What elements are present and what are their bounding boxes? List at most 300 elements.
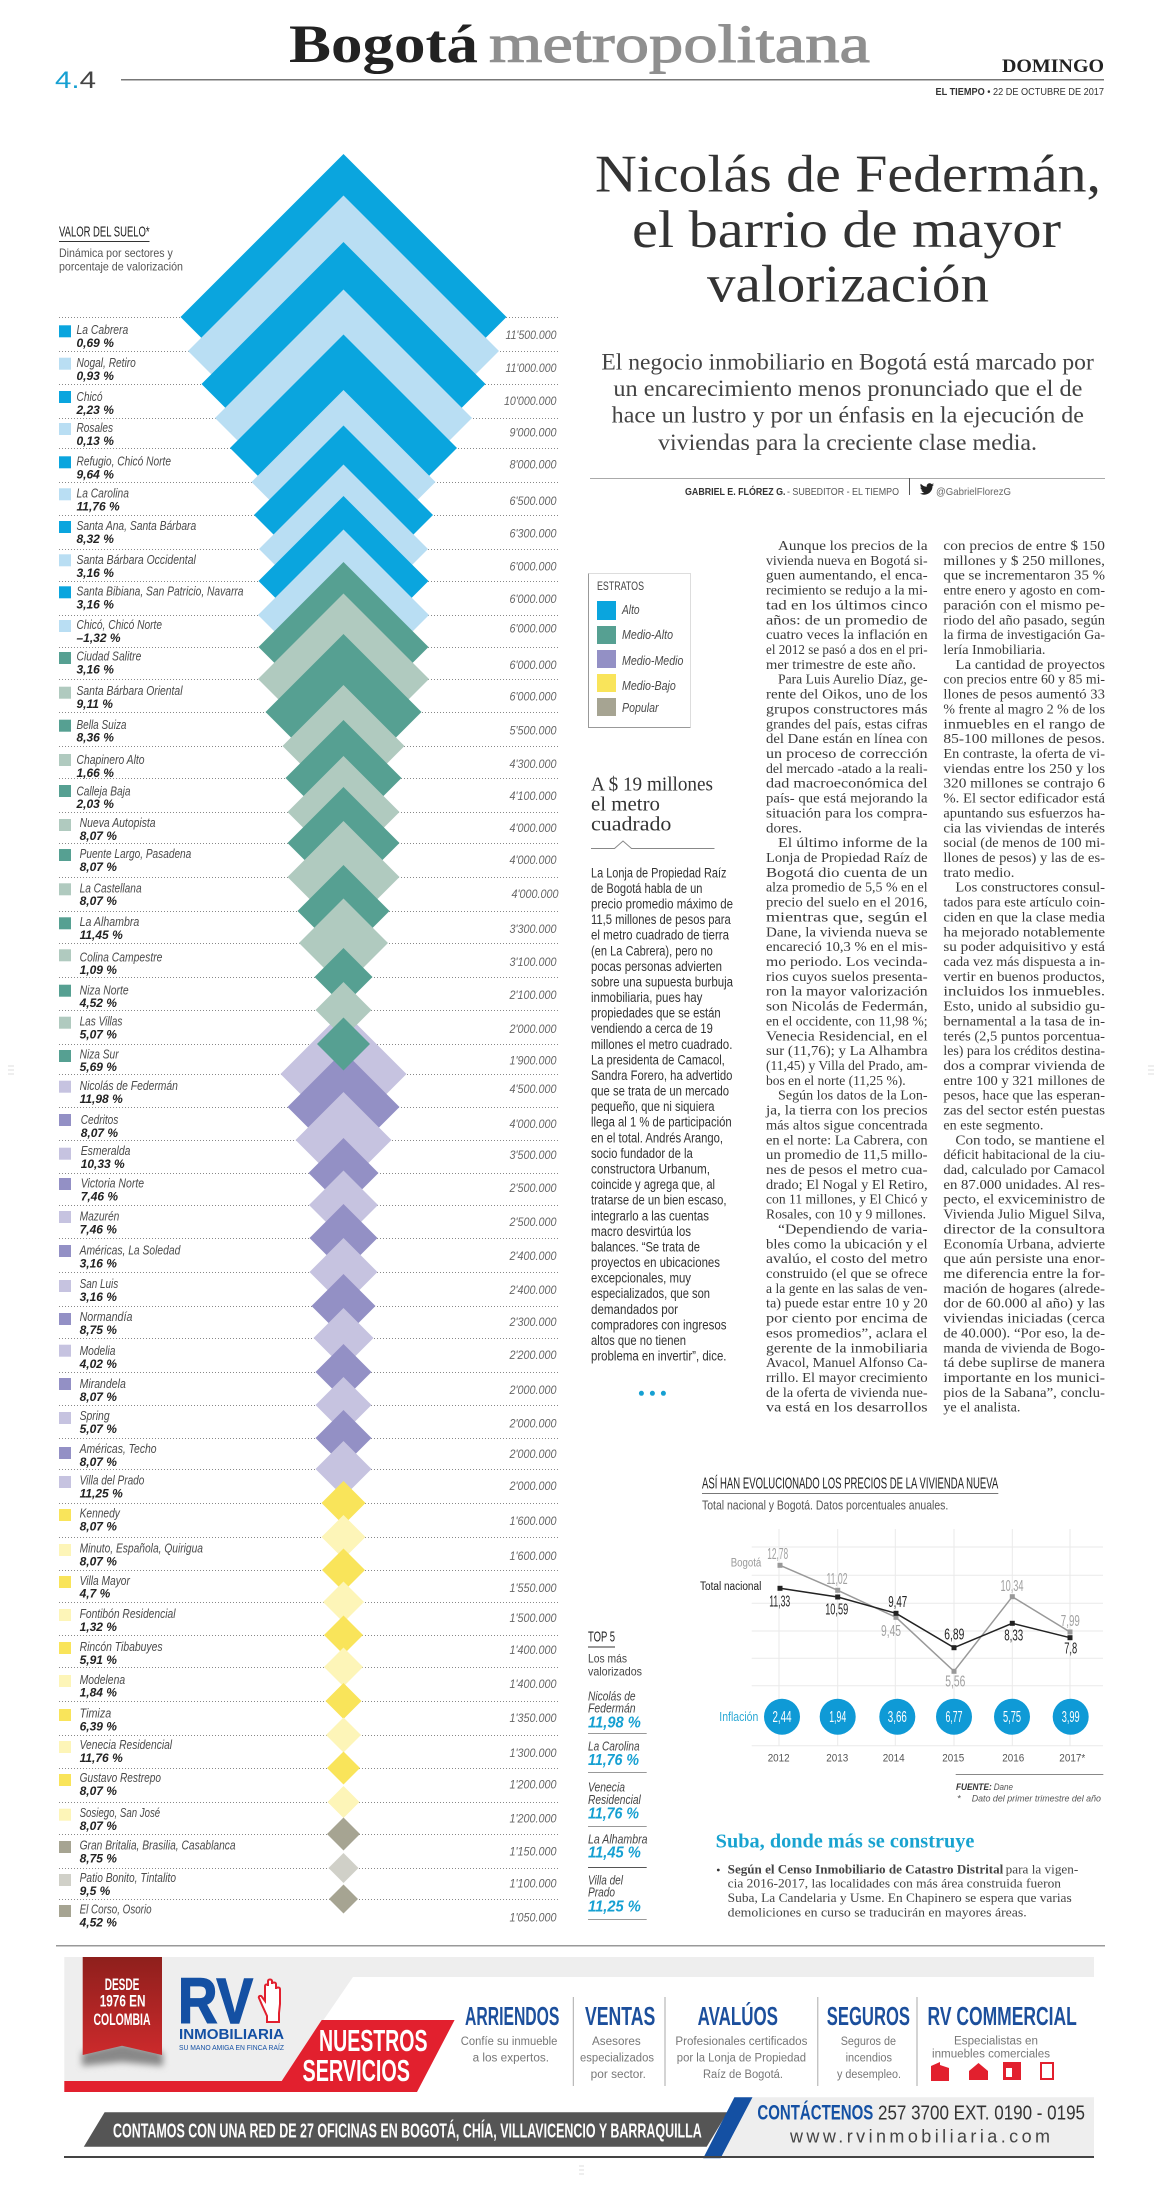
logo: RV Inmobiliaria: RV [178, 1965, 253, 2037]
row: Cedritos [59, 1113, 118, 1140]
sidebar body text: demandados por [591, 1302, 678, 1317]
price per square metre labels: 6'000.000 [510, 660, 557, 672]
article column 1: ja, la tierra con los precios [765, 1104, 928, 1119]
inflation circles: 5,75 [1003, 1709, 1021, 1726]
top 5: Venecia Residencial [588, 1781, 647, 1827]
row: San Luis: San Luis [80, 1277, 118, 1291]
row: Sosiego, San José [59, 1806, 160, 1833]
series: Bogotá: 7,99 [1061, 1613, 1080, 1630]
byline [590, 478, 1105, 498]
row: Ciudad Salitre: 3,16 % [76, 663, 114, 677]
service: arriendos: ARRIENDOS [465, 2001, 559, 2031]
chart source note [956, 1774, 1103, 1805]
row: Bella Suiza [59, 718, 127, 744]
article column 1: Lonja de Propiedad Raíz de [766, 851, 928, 866]
price per square metre labels: 2'000.000 [509, 1419, 557, 1431]
price per square metre labels: 2'100.000 [509, 990, 557, 1002]
article column 2: dos a comprar vivienda de [943, 1059, 1105, 1074]
price per square metre labels: 4'300.000 [510, 759, 557, 771]
price per square metre labels: 1'550.000 [510, 1583, 557, 1595]
inflation circles: 3,99 [1062, 1709, 1080, 1726]
sidebar body text: inmobiliaria, pues hay [591, 990, 703, 1005]
price per square metre labels: 4'000.000 [510, 855, 557, 867]
row: El Corso, Osorio [59, 1903, 152, 1930]
inflation circles: Inflación [719, 1710, 758, 1724]
article column 2: terés (2,5 puntos porcentua- [943, 1029, 1105, 1044]
row: Patio Bonito, Tintalito: Patio Bonito, Tintalito [80, 1871, 176, 1885]
article column 1: del Dane están en línea con [766, 732, 928, 747]
year axis: 2015 [942, 1753, 964, 1765]
row: Victoria Norte: 7,46 % [81, 1190, 118, 1204]
legend: estratos: Medio-Bajo [622, 679, 676, 693]
article column 2: me diferencia entre la for- [943, 1267, 1105, 1282]
row: Niza Norte [59, 983, 129, 1010]
sidebar heading: el metro [591, 795, 660, 816]
article column 1: son Nicolás de Federmán, [766, 1000, 928, 1015]
article column 1: con 11 millones, y El Chicó y [766, 1193, 928, 1208]
dateline: EL TIEMPO • 22 DE OCTUBRE DE 2017 [936, 87, 1104, 98]
service: seguros: y desempleo. [837, 2069, 901, 2081]
article column 1: vivienda nueva en Bogotá si- [766, 554, 928, 569]
row: La Alhambra [59, 915, 139, 942]
row: La Alhambra: La Alhambra [80, 915, 139, 929]
article column 1: recimiento se redujo a la mi- [766, 584, 928, 599]
row: Niza Norte: Niza Norte [80, 983, 129, 997]
row: Colina Campestre: 1,09 % [80, 963, 117, 977]
row: Modelena [59, 1673, 125, 1700]
article column 1: gerente de la inmobiliaria [766, 1341, 928, 1356]
chart heading: valor del suelo [59, 224, 183, 274]
service: seguros: SEGUROS [827, 2001, 910, 2031]
row: Fontibón Residencial [59, 1607, 176, 1634]
sidebar body text: llega al 1 % de participación [591, 1115, 732, 1130]
row: Gustavo Restrepo [59, 1771, 161, 1798]
row: Américas, La Soledad: Américas, La Soledad [79, 1244, 181, 1258]
row: Santa Ana, Santa Bárbara [59, 519, 196, 546]
service: seguros [827, 2001, 910, 2081]
price per square metre labels: 1'400.000 [510, 1645, 557, 1657]
inflation circles: 1,94 [829, 1709, 846, 1726]
row: Bella Suiza: Bella Suiza [76, 718, 127, 732]
row: Villa del Prado: 11,25 % [80, 1486, 123, 1500]
row: Santa Bárbara Occidental: 3,16 % [76, 566, 114, 580]
article column 2: Economía Urbana, advierte [943, 1237, 1105, 1252]
price per square metre labels: 6'000.000 [510, 692, 557, 704]
section title [289, 14, 870, 74]
series: Bogotá: 9,45 [881, 1623, 901, 1640]
article column 1: va está en los desarrollos [766, 1401, 928, 1416]
article column 2: riodo del año pasado, según [943, 613, 1105, 628]
three dots [639, 1391, 666, 1396]
row: Ciudad Salitre: Ciudad Salitre [76, 650, 141, 664]
masthead rule [121, 79, 1104, 80]
row: Spring: 5,07 % [80, 1422, 117, 1436]
article column 1: mientras que, según el [766, 910, 928, 925]
intro paragraph: El negocio inmobiliario en Bogotá está marcado por [601, 349, 1094, 374]
article column 2: su poder adquisitivo y está [943, 940, 1106, 955]
price per square metre labels [504, 330, 559, 1925]
article column 1: encareció 10,3 % en el mis- [766, 940, 928, 955]
service: arriendos: a los expertos. [473, 2053, 549, 2065]
sidebar heading: cuadrado [591, 815, 671, 836]
row: La Castellana [59, 882, 142, 908]
row: Villa Mayor: Villa Mayor [80, 1574, 131, 1588]
row: Santa Bibiana, San Patricio, Navarra: 3,16 % [76, 598, 114, 612]
row: Nicolás de Federmán [59, 1079, 178, 1106]
row: Las Villas: 5,07 % [80, 1028, 117, 1042]
article column 1: “Dependiendo de varia- [778, 1222, 928, 1237]
row: La Castellana: La Castellana [80, 882, 142, 896]
sidebar body text: sobre una supuesta burbuja [591, 974, 733, 989]
row: Calleja Baja: Calleja Baja [76, 785, 131, 799]
price per square metre labels: 1'050.000 [510, 1913, 557, 1925]
year axis: 2017* [1059, 1753, 1086, 1765]
sidebar body text: La presidenta de Camacol, [591, 1052, 725, 1067]
article column 2: zas del sector estén puestas [943, 1104, 1105, 1119]
article column 2: 320 millones se contrajo 6 [943, 777, 1105, 792]
article column 2 [943, 539, 1106, 1416]
nuestros servicios: NUESTROS [319, 2023, 428, 2058]
row: Gran Britalia, Brasilia, Casablanca [59, 1839, 236, 1866]
article column 1: sur (11,76); y La Alhambra [766, 1044, 928, 1059]
article column 2: bernamental a la tasa de in- [943, 1014, 1105, 1029]
article column 1: nes de pesos el metro cua- [766, 1163, 928, 1178]
advertisement: RV Inmobiliaria [64, 1957, 1094, 2158]
price per square metre labels: 1'100.000 [510, 1879, 557, 1891]
price per square metre labels: 1'600.000 [510, 1551, 557, 1563]
row: Niza Sur: Niza Sur [80, 1048, 119, 1062]
row: Victoria Norte: Victoria Norte [81, 1177, 144, 1191]
byline: @GabrielFlorezG [936, 486, 1011, 498]
article column 1: un promedio de 11,5 millo- [766, 1148, 928, 1163]
row: Patio Bonito, Tintalito: 9,5 % [80, 1884, 111, 1898]
row: Américas, Techo: Américas, Techo [79, 1442, 157, 1456]
row: La Cabrera: La Cabrera [76, 323, 128, 337]
article column 2: ciden en que la clase media [943, 910, 1106, 925]
article column 2: incluidos los inmuebles. [943, 985, 1105, 1000]
service: RV commercial [928, 2001, 1077, 2081]
row: La Cabrera [59, 323, 128, 350]
article column 2: en 87.000 unidades. Al res- [943, 1178, 1105, 1193]
price per square metre labels: 1'200.000 [510, 1780, 557, 1792]
article column 2: déficit habitacional de la ciu- [943, 1148, 1105, 1163]
year axis [768, 1753, 1086, 1765]
row: La Alhambra: 11,45 % [80, 928, 123, 942]
price per square metre labels: 6'500.000 [510, 496, 557, 508]
sidebar body text: coincide y agrega que, al [591, 1177, 715, 1192]
diamonds: estrato medio-medio [280, 1011, 406, 1497]
row: Normandía [59, 1310, 132, 1337]
top 5: Nicolás de Federmán: 11,98 % [588, 1715, 641, 1732]
row: Colina Campestre: Colina Campestre [80, 951, 162, 965]
sidebar body text: especializados, que son [591, 1286, 710, 1301]
sidebar body text: proyectos en ubicaciones [591, 1255, 720, 1270]
row: Spring [59, 1409, 117, 1436]
top 5 ranking: valorizados [588, 1664, 642, 1678]
article column 2: La cantidad de proyectos [955, 658, 1105, 673]
legend: estratos: Alto [621, 603, 640, 617]
contact band [64, 2097, 1094, 2158]
row: Esmeralda [59, 1144, 130, 1171]
nuestros servicios [302, 2023, 428, 2088]
byline: GABRIEL E. FLÓREZ G. [685, 485, 786, 498]
row: La Carolina: 11,76 % [76, 500, 120, 514]
price per square metre labels: 2'500.000 [509, 1183, 557, 1195]
row: La Cabrera: 0,69 % [76, 336, 114, 350]
inflation circles: 2,44 [772, 1709, 792, 1726]
callout: Suba [716, 1831, 1078, 1919]
article column 2: que se incrementaron 35 % [943, 569, 1105, 584]
top 5: La Carolina: La Carolina [588, 1740, 640, 1754]
diamond stack: land values [180, 154, 506, 1914]
row: Villa del Prado: Villa del Prado [80, 1474, 144, 1488]
article column 2: director de la consultora [943, 1222, 1106, 1237]
series: Bogotá: 5,56 [945, 1674, 965, 1691]
article column 2: vertir en buenos productos, [943, 970, 1105, 985]
row: Nueva Autopista: Nueva Autopista [80, 816, 156, 830]
service: arriendos [461, 2001, 559, 2065]
page number: 4.4 [55, 67, 96, 94]
chart heading: valor del suelo: Dinámica por sectores y [59, 246, 173, 260]
intro paragraph: hace un lustro y por un énfasis en la ejecución de [612, 403, 1084, 428]
ribbon: desde 1976: COLOMBIA [94, 2010, 150, 2029]
sidebar body text: que se trata de un mercado [591, 1084, 729, 1099]
dotted row lines [59, 318, 558, 1900]
series: Bogotá: 10,34 [1000, 1578, 1024, 1595]
top 5: Nicolás de Federmán: Federmán [588, 1702, 636, 1716]
contact band: CONTAMOS CON UNA RED DE 27 OFICINAS EN BOGOTÁ, CHÍA, VILLAVICENCIO Y BARRAQUILLA [113, 2120, 702, 2143]
article column 1: drado; El Nogal y El Retiro, [766, 1178, 928, 1193]
row: Mazurén [59, 1210, 119, 1236]
article column 2: paración con el mismo pe- [943, 598, 1105, 613]
article column 1: más altos sigue concentrada [766, 1118, 928, 1133]
article column 1: guen aumentando, el enca- [766, 569, 928, 584]
row: Rincón Tibabuyes: 5,91 % [80, 1653, 117, 1667]
service: seguros: incendios [846, 2053, 892, 2065]
article column 2: dad, calculado por Camacol [943, 1163, 1105, 1178]
service: RV commercial: Especialistas en [954, 2035, 1038, 2047]
icon: red hand [259, 1980, 280, 2022]
sidebar body text: en el total. Andrés Arango, [591, 1130, 723, 1145]
chart source note: FUENTE: [956, 1782, 992, 1793]
article column 1: en el norte: La Cabrera, con [766, 1133, 928, 1148]
price per square metre labels: 1'500.000 [510, 1613, 557, 1625]
chart heading: valor del suelo: VALOR DEL SUELO* [59, 224, 150, 241]
legend: estratos [588, 574, 690, 728]
main headline: el barrio de mayor [632, 201, 1061, 259]
article column 1: dad macroeconómica del [766, 777, 928, 792]
year axis: 2016 [1002, 1753, 1024, 1765]
row: Modelia [59, 1344, 117, 1371]
sidebar body text: Sandra Forero, ha advertido [591, 1068, 732, 1083]
sidebar body text: pequeño, que ni siquiera [591, 1099, 715, 1114]
row: Américas, La Soledad [59, 1244, 181, 1270]
ribbon: desde 1976: DESDE [105, 1975, 139, 1994]
article column 1: esos promedios”, aclara el [766, 1326, 928, 1341]
row: Puente Largo, Pasadena [59, 847, 191, 874]
row: Santa Bárbara Occidental [59, 553, 197, 580]
top 5: La Alhambra: 11,45 % [588, 1845, 641, 1862]
price per square metre labels: 5'500.000 [510, 726, 557, 738]
row: Santa Bárbara Oriental: 9,11 % [76, 697, 113, 711]
price per square metre labels: 1'900.000 [510, 1056, 557, 1068]
price per square metre labels: 6'000.000 [510, 624, 557, 636]
article column 1: a la gente en las salas de ven- [766, 1282, 928, 1297]
sidebar body text: vendiendo a cerca de 19 [591, 1021, 713, 1036]
row: Nogal, Retiro: Nogal, Retiro [76, 356, 136, 370]
row: Mazurén: 7,46 % [80, 1222, 117, 1236]
article column 2: Vivienda Julio Miguel Silva, [943, 1208, 1105, 1223]
row: Colina Campestre [59, 949, 162, 977]
row: Niza Sur [59, 1048, 119, 1074]
top 5: Venecia Residencial: Residencial [588, 1793, 642, 1807]
row: Bella Suiza: 8,36 % [76, 730, 114, 744]
series: Bogotá: 12,78 [767, 1546, 788, 1563]
row: Nogal, Retiro: 0,93 % [76, 369, 114, 383]
article column 1: Dane, la vivienda nueva se [766, 925, 928, 940]
price per square metre labels: 9'000.000 [510, 428, 557, 440]
service: avalúos [675, 2001, 808, 2081]
article column 2: con precios de entre $ 150 [943, 539, 1105, 554]
article column 2: llones de pesos) y las de es- [943, 851, 1105, 866]
row: Mazurén: Mazurén [80, 1210, 119, 1224]
row: Modelena: Modelena [80, 1673, 125, 1687]
price per square metre labels: 6'300.000 [510, 529, 557, 541]
row: Victoria Norte [59, 1177, 144, 1204]
contact band: 257 3700 EXT. 0190 - 0195 [878, 2102, 1085, 2124]
inflation circles [719, 1699, 1089, 1735]
sidebar body text: precio promedio máximo de [591, 896, 733, 912]
ribbon: desde 1976 [82, 1957, 163, 2066]
row: Ciudad Salitre [59, 650, 141, 677]
sidebar heading: A $ 19 millones [591, 775, 713, 796]
row: Nicolás de Federmán: 11,98 % [80, 1092, 123, 1106]
row: Niza Sur: 5,69 % [80, 1060, 117, 1074]
price per square metre labels: 2'200.000 [509, 1350, 557, 1362]
price per square metre labels: 1'350.000 [510, 1713, 557, 1725]
price per square metre labels: 2'000.000 [509, 1449, 557, 1461]
callout: Suba: cia 2016-2017, las localidades con más área construida fueron [728, 1877, 1062, 1891]
row: Gustavo Restrepo: Gustavo Restrepo [80, 1771, 161, 1785]
row: Nueva Autopista: 8,07 % [80, 829, 117, 843]
row: San Luis: 3,16 % [80, 1290, 117, 1304]
sidebar body text: altos que no tienen [591, 1333, 686, 1348]
row: Venecia Residencial: Venecia Residencial [80, 1738, 173, 1752]
article column 1: precio del suelo en el 2016, [766, 896, 928, 911]
article column 1: mer trimestre de este año. [766, 658, 916, 673]
row: La Carolina: La Carolina [76, 487, 129, 501]
price per square metre labels: 4'000.000 [510, 1119, 557, 1131]
article column 2: pios de la Sabana”, conclu- [943, 1386, 1105, 1401]
article column 2: cada vez más dispuesta a in- [943, 955, 1105, 970]
icon: twitter bird [920, 483, 934, 495]
chart heading: valor del suelo: porcentaje de valorización [59, 260, 183, 274]
article column 2: pesos, hace que las esperan- [943, 1089, 1105, 1104]
row: Esmeralda: Esmeralda [81, 1144, 130, 1158]
chart title: Total nacional y Bogotá. Datos porcentuales anuales. [702, 1498, 948, 1512]
series: Total nacional: 9,47 [888, 1594, 907, 1611]
chart source note: * [957, 1794, 961, 1805]
article column 1 [765, 539, 928, 1416]
row: Santa Bárbara Oriental [59, 684, 184, 711]
row: Modelia: Modelia [80, 1344, 116, 1358]
article column 1: rrillo. El mayor crecimiento [766, 1371, 928, 1386]
series: Bogotá: 11,02 [826, 1571, 848, 1588]
article column 2: la firma de investigación Ga- [943, 628, 1105, 643]
service: avalúos: por la Lonja de Propiedad [677, 2053, 806, 2065]
article column 2: lería Inmobiliaria. [943, 643, 1045, 658]
row: Kennedy [59, 1507, 121, 1534]
row: La Castellana: 8,07 % [80, 894, 117, 908]
row: Niza Norte: 4,52 % [79, 996, 117, 1010]
row: Timiza: Timiza [80, 1707, 111, 1721]
contact band: CONTÁCTENOS [757, 2101, 873, 2124]
article column 1: avalúo, el costo del metro [766, 1252, 928, 1267]
article column 1: Rosales, con 10 y 9 millones. [766, 1208, 926, 1223]
article column 2: les) para los créditos destina- [943, 1044, 1105, 1059]
article column 1: grupos constructores más [766, 702, 928, 717]
callout: Suba: para la vigen- [1006, 1862, 1078, 1876]
top 5: La Carolina [588, 1740, 647, 1773]
row: Patio Bonito, Tintalito [59, 1871, 176, 1898]
row: Rincón Tibabuyes: Rincón Tibabuyes [80, 1640, 163, 1654]
article column 1: (11,45) y Villa del Prado, am- [766, 1059, 928, 1074]
article column 1: por ciento por encima de [766, 1312, 928, 1327]
row: Normandía: 8,75 % [80, 1323, 117, 1337]
row: Villa del Prado [59, 1474, 144, 1500]
row: Refugio, Chicó Norte: Refugio, Chicó Norte [76, 455, 171, 469]
price per square metre labels: 4'500.000 [510, 1084, 557, 1096]
legend: estratos: Medio-Alto [622, 628, 673, 642]
row: Timiza [59, 1707, 117, 1734]
price per square metre labels: 2'500.000 [509, 1217, 557, 1229]
service: seguros: Seguros de [841, 2036, 896, 2048]
service: RV commercial: RV COMMERCIAL [928, 2001, 1077, 2031]
top 5: Nicolás de Federmán [588, 1690, 647, 1734]
price per square metre labels: 6'000.000 [510, 594, 557, 606]
row: Nogal, Retiro [59, 356, 136, 383]
price per square metre labels: 4'100.000 [510, 791, 557, 803]
sidebar body text: socio fundador de la [591, 1146, 693, 1161]
logo: RV Inmobiliaria [178, 1965, 285, 2052]
byline: - SUBEDITOR - EL TIEMPO [787, 486, 899, 498]
row: Calleja Baja [59, 785, 131, 811]
price per square metre labels: 11'000.000 [506, 363, 557, 375]
ribbon: desde 1976: 1976 EN [100, 1992, 146, 2011]
price per square metre labels: 2'000.000 [509, 1024, 557, 1036]
row: Sosiego, San José: Sosiego, San José [80, 1806, 160, 1820]
row: Sosiego, San José: 8,07 % [80, 1819, 117, 1833]
series: Total nacional: 10,59 [825, 1602, 848, 1619]
series: Total nacional: 8,33 [1004, 1627, 1023, 1644]
article column 1: situación para los compra- [766, 806, 928, 821]
article column 2: en este segmento. [943, 1118, 1043, 1133]
series: Total nacional: 11,33 [769, 1594, 790, 1611]
row: Minuto, Española, Quirigua: Minuto, Española, Quirigua [80, 1542, 203, 1556]
line chart: precios de la vivienda nueva [700, 1473, 1103, 1805]
diamonds: estrato popular [327, 1818, 360, 1914]
main headline [595, 146, 1101, 314]
row: Esmeralda: 10,33 % [81, 1157, 125, 1171]
price per square metre labels: 2'000.000 [509, 1385, 557, 1397]
ad background [64, 1957, 1094, 2092]
row: Spring: Spring [80, 1409, 110, 1423]
row: Chapinero Alto: 1,66 % [76, 766, 114, 780]
logo: RV Inmobiliaria: SU MANO AMIGA EN FINCA RAÍZ [179, 2043, 285, 2052]
article column 2: pecto, el exviceministro de [943, 1193, 1105, 1208]
price per square metre labels: 2'300.000 [509, 1317, 557, 1329]
logo: RV Inmobiliaria: INMOBILIARIA [179, 2027, 285, 2043]
